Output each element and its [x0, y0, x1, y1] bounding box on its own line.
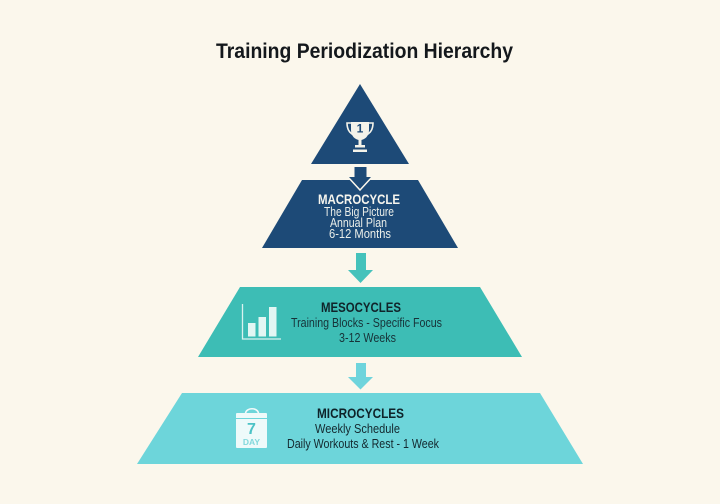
panel: mesocycles [198, 287, 522, 357]
arrow: mesocycles to microcycles [348, 363, 373, 390]
text: macrocycle details: The Big Picture [324, 204, 394, 219]
icon: bar chart [242, 304, 281, 339]
text: macrocycle details [324, 204, 394, 241]
heading: macrocycle: MACROCYCLE [318, 191, 400, 207]
panel: macrocycle [262, 180, 458, 248]
title: Training Periodization Hierarchy [216, 40, 513, 63]
icon: trophy: 1 [357, 122, 364, 136]
icon: calendar: DAY [243, 437, 260, 447]
text: macrocycle details: Annual Plan [330, 215, 387, 230]
text: mesocycles details: 3-12 Weeks [339, 330, 396, 345]
panel: apex triangle with trophy [311, 84, 409, 164]
text: microcycles details: Daily Workouts & Rest - 1 Week [287, 436, 439, 451]
icon: calendar [236, 409, 267, 448]
text: macrocycle details: 6-12 Months [329, 226, 391, 241]
heading: mesocycles: MESOCYCLES [321, 299, 401, 315]
text: mesocycles details [291, 315, 442, 345]
panel: microcycles [137, 393, 583, 464]
text: mesocycles details: Training Blocks - Specific Focus [291, 315, 442, 330]
heading: microcycles: MICROCYCLES [317, 405, 404, 421]
icon: calendar: 7 [247, 421, 256, 438]
arrow: macrocycle to mesocycles [348, 253, 373, 283]
text: microcycles details: Weekly Schedule [315, 421, 400, 436]
arrow: apex to macrocycle [348, 167, 372, 190]
text: microcycles details [287, 421, 439, 451]
